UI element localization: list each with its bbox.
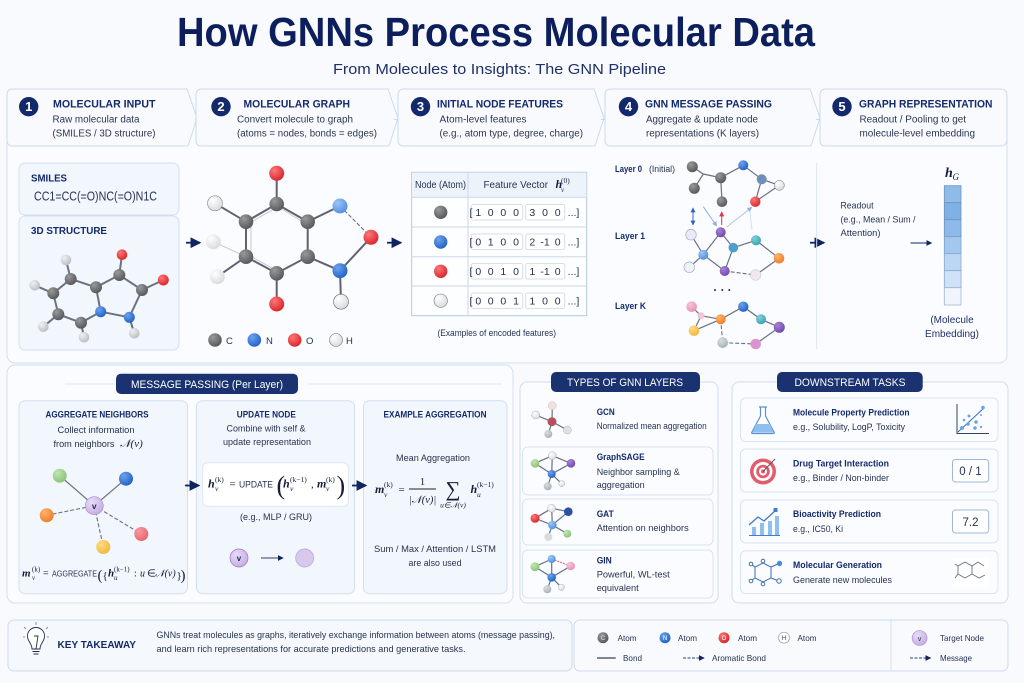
atom legend: N bbox=[266, 336, 273, 347]
legend: target node bbox=[912, 630, 984, 646]
legend: carbon atom: C bbox=[601, 636, 606, 642]
feature table: [ bbox=[470, 296, 473, 308]
sub-panel: update node: ) bbox=[336, 471, 345, 500]
layer type: GraphSAGE bbox=[522, 447, 713, 495]
panel: message passing per layer bbox=[7, 365, 513, 603]
layer type: GIN bbox=[522, 550, 713, 598]
layer type: GCN: GCN bbox=[597, 407, 615, 418]
feature table: 0 bbox=[488, 207, 494, 219]
pipeline step 5: graph representation: 5 bbox=[838, 99, 846, 114]
pipeline step 4: GNN message passing: representations (K layers) bbox=[646, 129, 759, 140]
arrow: input to graph bbox=[186, 242, 200, 244]
sub-panel: aggregate neighbors: (k) bbox=[32, 566, 41, 574]
sub-panel: example aggregation: h bbox=[470, 482, 478, 496]
sub-panel: example aggregation: = bbox=[398, 484, 405, 496]
feature table: 0 bbox=[542, 207, 548, 219]
sub-panel: aggregate neighbors: } bbox=[176, 570, 182, 582]
feature table bbox=[412, 172, 587, 316]
task: bioactivity prediction bbox=[740, 500, 998, 543]
feature table: 0 bbox=[500, 236, 506, 248]
pipeline step 3: initial node features: Atom-level features bbox=[440, 115, 526, 126]
heading: message passing: MESSAGE PASSING (Per Layer) bbox=[131, 379, 283, 391]
molecule embedding vector: Embedding) bbox=[925, 329, 979, 340]
feature table: ...] bbox=[568, 266, 579, 278]
feature table: 1 bbox=[500, 266, 506, 278]
sub-panel: example aggregation: m bbox=[375, 482, 384, 496]
feature table: 0 bbox=[475, 296, 481, 308]
legend: target node: v bbox=[918, 636, 922, 643]
sub-panel: example aggregation: EXAMPLE AGGREGATION bbox=[384, 410, 486, 420]
pipeline step 1: molecular input: → bbox=[193, 113, 202, 123]
panel: SMILES: SMILES bbox=[31, 172, 67, 184]
feature table: v bbox=[561, 186, 565, 194]
sub-panel: example aggregation: Mean Aggregation bbox=[396, 453, 470, 464]
layer type: GAT bbox=[522, 499, 713, 545]
layer type: GIN: equivalent bbox=[597, 583, 639, 594]
feature table: Node (Atom) bbox=[415, 180, 466, 191]
feature table: 0 bbox=[555, 207, 561, 219]
task: drug target interaction bbox=[740, 449, 998, 492]
arrow: graph to features bbox=[387, 242, 401, 244]
sub-panel: aggregate neighbors: AGGREGATE NEIGHBORS bbox=[46, 410, 148, 420]
panel: key takeaway: GNNs treat molecules as graphs, iteratively exchange information between atoms (message passing), bbox=[156, 630, 555, 640]
arrow: update to example bbox=[352, 484, 366, 486]
feature table: 1 bbox=[529, 266, 535, 278]
feature table: 1 bbox=[529, 296, 535, 308]
pipeline step 5: graph representation: Readout / Pooling to get bbox=[860, 115, 966, 126]
feature table: 0 bbox=[500, 207, 506, 219]
sub-panel: update node: v bbox=[290, 484, 294, 493]
task: molecular generation: Generate new molecules bbox=[793, 575, 892, 586]
sub-panel: update node: Combine with self & bbox=[226, 424, 306, 435]
sub-panel: aggregate neighbors: h bbox=[108, 568, 114, 580]
sub-panel: update node bbox=[196, 401, 354, 594]
sub-panel: update node: , bbox=[311, 479, 314, 491]
legend: target node: Target Node bbox=[940, 633, 984, 643]
panel: key takeaway: KEY TAKEAWAY bbox=[58, 639, 136, 651]
feature table: [ bbox=[470, 236, 473, 248]
sub-panel: example aggregation: ∑ bbox=[446, 477, 460, 501]
panel: 3D structure: 3D STRUCTURE bbox=[31, 225, 107, 237]
panel: key takeaway: and learn rich representations for accurate predictions and generative tasks. bbox=[156, 644, 466, 654]
value box: regression output: 7.2 bbox=[962, 517, 978, 529]
sub-panel: aggregate neighbors: = bbox=[43, 569, 49, 580]
sub-panel: aggregate neighbors: ( bbox=[98, 568, 102, 584]
legend: hydrogen atom bbox=[778, 632, 816, 643]
pipeline step 4: GNN message passing: Aggregate & update node bbox=[646, 115, 758, 126]
panel: legend bbox=[574, 620, 1008, 671]
panel: pipeline container bbox=[7, 118, 1007, 363]
task: bioactivity prediction: e.g., IC50, Ki bbox=[793, 524, 843, 535]
heading: downstream tasks: DOWNSTREAM TASKS bbox=[794, 377, 906, 389]
feature table: 0 bbox=[555, 266, 561, 278]
sub-panel: aggregate neighbors: AGGREGATE bbox=[52, 570, 97, 579]
message passing layers diagram: Layer K bbox=[615, 301, 646, 311]
panel: 3D structure bbox=[19, 216, 179, 350]
legend: nitrogen atom: Atom bbox=[678, 633, 697, 643]
value box: regression output bbox=[952, 510, 989, 533]
sub-panel: example aggregation: |𝒩(v)| bbox=[409, 495, 436, 506]
feature table: 0 bbox=[555, 236, 561, 248]
pipeline step 4: GNN message passing: 4 bbox=[625, 99, 633, 114]
sub-panel: example aggregation: u∈𝒩(v) bbox=[440, 501, 466, 510]
pipeline step 4: GNN message passing: → bbox=[814, 113, 823, 123]
layer type: GCN bbox=[532, 402, 707, 438]
layer type: GIN: GIN bbox=[597, 556, 612, 566]
heading: types of GNN layers: TYPES OF GNN LAYERS bbox=[567, 377, 683, 389]
panel: types of GNN layers bbox=[520, 372, 718, 603]
legend: oxygen atom bbox=[718, 632, 757, 643]
molecule embedding vector bbox=[925, 166, 979, 340]
title: How GNNs Process Molecular Data bbox=[177, 9, 816, 55]
sub-panel: update node: update representation bbox=[223, 437, 311, 448]
legend: message bbox=[910, 653, 972, 663]
pipeline step 3: initial node features: INITIAL NODE FEATURES bbox=[437, 98, 563, 110]
layer type: GIN: Powerful, WL-test bbox=[597, 570, 670, 580]
layer type: GraphSAGE: GraphSAGE bbox=[597, 452, 645, 463]
sub-panel: aggregate neighbors: 𝒩(v) bbox=[120, 438, 143, 450]
feature table: 0 bbox=[513, 266, 519, 278]
sub-panel: example aggregation: (k) bbox=[384, 480, 393, 489]
feature table: 0 bbox=[475, 236, 481, 248]
task: molecular generation bbox=[740, 551, 998, 594]
sub-panel: update node: v bbox=[215, 484, 219, 493]
sub-panel: update node: h bbox=[283, 477, 290, 491]
sub-panel: example aggregation: u bbox=[477, 490, 481, 499]
legend: hydrogen atom: H bbox=[782, 636, 786, 642]
legend: hydrogen atom: Atom bbox=[798, 633, 816, 643]
task: molecule property prediction: Molecule Property Prediction bbox=[793, 408, 910, 419]
sub-panel: aggregate neighbors: ∈ bbox=[147, 569, 156, 580]
atom legend: O bbox=[306, 336, 313, 347]
pipeline step 3: initial node features: (e.g., atom type, degree, charge) bbox=[440, 129, 583, 140]
layer type: GraphSAGE: aggregation bbox=[597, 480, 645, 491]
pipeline step 2: molecular graph: Convert molecule to graph bbox=[237, 115, 353, 126]
feature table: 1 bbox=[475, 207, 481, 219]
legend: message: Message bbox=[940, 653, 972, 663]
pipeline step 1: molecular input: (SMILES / 3D structure) bbox=[52, 129, 156, 140]
task: molecular generation: Molecular Generation bbox=[793, 560, 882, 571]
pipeline step 1: molecular input bbox=[7, 89, 202, 146]
feature table: 0 bbox=[513, 207, 519, 219]
task: bioactivity prediction: Bioactivity Prediction bbox=[793, 509, 881, 520]
pipeline step 4: GNN message passing bbox=[605, 89, 823, 146]
feature table: -1 bbox=[540, 236, 550, 248]
sub-panel: update node: ( bbox=[276, 471, 285, 500]
legend: carbon atom: Atom bbox=[618, 633, 637, 643]
sub-panel: example aggregation bbox=[364, 401, 507, 594]
feature table: 1 bbox=[488, 236, 494, 248]
pipeline step 5: graph representation: GRAPH REPRESENTATION bbox=[859, 98, 993, 110]
feature table: -1 bbox=[540, 266, 550, 278]
task: molecule property prediction: e.g., Solubility, LogP, Toxicity bbox=[793, 422, 905, 433]
sub-panel: example aggregation: (k−1) bbox=[477, 480, 494, 489]
layer type: GAT: Attention on neighbors bbox=[597, 523, 689, 534]
sub-panel: example aggregation: v bbox=[384, 490, 388, 499]
icon: rising bar chart bbox=[749, 508, 780, 536]
icon: flask bbox=[752, 407, 774, 434]
legend: bond bbox=[597, 653, 642, 663]
sub-panel: update node: (k) bbox=[215, 475, 224, 484]
readout text: Readout bbox=[840, 201, 874, 212]
sub-panel: aggregate neighbors bbox=[19, 401, 188, 594]
icon: scatter plot bbox=[957, 404, 989, 434]
arrow: readout to embedding bbox=[910, 242, 932, 244]
feature table: ...] bbox=[568, 296, 579, 308]
sub-panel: aggregate neighbors: (k−1) bbox=[114, 566, 130, 574]
pipeline step 1: molecular input: 1 bbox=[25, 99, 32, 114]
sub-panel: update node: v bbox=[326, 484, 330, 493]
panel: SMILES bbox=[19, 163, 179, 215]
feature table: 0 bbox=[488, 296, 494, 308]
sub-panel: update node: UPDATE NODE bbox=[237, 410, 296, 420]
molecule embedding vector: h bbox=[945, 166, 953, 181]
sub-panel: update node: v bbox=[237, 554, 242, 563]
molecule embedding vector: G bbox=[952, 172, 960, 182]
sub-panel: aggregate neighbors: from neighbors bbox=[54, 439, 115, 450]
pipeline step 3: initial node features bbox=[398, 89, 608, 146]
pipeline step 1: molecular input: Raw molecular data bbox=[52, 115, 140, 126]
legend: carbon atom bbox=[598, 632, 637, 643]
legend: nitrogen atom: N bbox=[663, 636, 667, 642]
arrow: aggregate to update bbox=[185, 484, 199, 486]
feature table: [ bbox=[470, 266, 473, 278]
sub-panel: aggregate neighbors: v bbox=[92, 501, 97, 511]
sub-panel: update node: (k) bbox=[326, 475, 335, 484]
pipeline step 2: molecular graph: → bbox=[392, 113, 401, 123]
atom legend: H bbox=[346, 336, 353, 347]
heading: types of GNN layers bbox=[551, 372, 700, 392]
pipeline step 2: molecular graph: MOLECULAR GRAPH bbox=[244, 98, 350, 110]
sub-panel: example aggregation: are also used bbox=[408, 558, 462, 569]
sub-panel: update node: = bbox=[230, 479, 236, 491]
sub-panel: aggregate neighbors: { bbox=[102, 570, 108, 582]
pipeline step 2: molecular graph: 2 bbox=[217, 99, 225, 114]
sub-panel: aggregate neighbors: m bbox=[22, 568, 31, 580]
arrow: layers to readout bbox=[810, 242, 824, 244]
pipeline step 4: GNN message passing: GNN MESSAGE PASSING bbox=[645, 98, 772, 110]
feature table: h bbox=[556, 177, 562, 191]
readout text: (e.g., Mean / Sum / bbox=[840, 214, 916, 226]
readout text bbox=[840, 201, 916, 239]
feature table: 1 bbox=[513, 296, 519, 308]
icon: generated molecule bbox=[749, 559, 782, 586]
table caption: (Examples of encoded features) bbox=[438, 328, 556, 338]
sub-panel: update node: (e.g., MLP / GRU) bbox=[240, 512, 312, 523]
feature table: 0 bbox=[500, 296, 506, 308]
legend: aromatic bond: Aromatic Bond bbox=[712, 653, 766, 663]
panel: SMILES: CC1=CC(=O)NC(=O)N1C bbox=[34, 188, 157, 204]
task: molecule property prediction bbox=[740, 398, 998, 442]
task: drug target interaction: e.g., Binder / Non-binder bbox=[793, 473, 889, 484]
icon: target bbox=[750, 458, 776, 484]
feature table: 0 bbox=[542, 296, 548, 308]
value box: binary output bbox=[952, 460, 989, 482]
sub-panel: aggregate neighbors: : bbox=[134, 569, 137, 580]
pipeline step 3: initial node features: 3 bbox=[417, 99, 424, 114]
feature table: 0 bbox=[475, 266, 481, 278]
value box: binary output: 0 / 1 bbox=[959, 466, 982, 478]
message passing layers diagram bbox=[615, 160, 785, 349]
feature table: 2 bbox=[529, 236, 535, 248]
sub-panel: update node: h bbox=[208, 477, 215, 491]
pipeline step 3: initial node features: → bbox=[599, 113, 608, 123]
molecular graph diagram bbox=[206, 166, 378, 312]
legend: oxygen atom: Atom bbox=[738, 633, 757, 643]
sub-panel: aggregate neighbors: u bbox=[114, 574, 118, 582]
layer type: GCN: Normalized mean aggregation bbox=[597, 421, 707, 431]
sub-panel: aggregate neighbors: ) bbox=[180, 568, 186, 584]
feature table: ...] bbox=[568, 236, 579, 248]
panel: key takeaway bbox=[8, 620, 572, 671]
layer type: GraphSAGE: Neighbor sampling & bbox=[597, 467, 680, 478]
subtitle: From Molecules to Insights: The GNN Pipeline bbox=[333, 61, 666, 78]
sub-panel: update node: UPDATE bbox=[239, 480, 273, 491]
legend: oxygen atom: O bbox=[722, 636, 727, 642]
feature table: 0 bbox=[488, 266, 494, 278]
sub-panel: aggregate neighbors: Collect information bbox=[58, 425, 134, 436]
feature table: Feature Vector bbox=[484, 180, 549, 191]
legend: aromatic bond bbox=[683, 653, 766, 663]
feature table: [ bbox=[470, 207, 473, 219]
readout text: Attention) bbox=[840, 228, 880, 239]
feature table: 0 bbox=[513, 236, 519, 248]
atom legend bbox=[208, 333, 353, 347]
sub-panel: example aggregation: Sum / Max / Attention / LSTM bbox=[374, 544, 496, 555]
heading: message passing bbox=[116, 374, 298, 394]
legend: bond: Bond bbox=[623, 653, 642, 663]
panel: downstream tasks bbox=[732, 372, 1008, 603]
sub-panel: aggregate neighbors: 𝒩(v) bbox=[155, 569, 176, 580]
atom legend: C bbox=[226, 336, 233, 347]
feature table: (0) bbox=[561, 176, 570, 185]
sub-panel: aggregate neighbors: u bbox=[140, 569, 145, 580]
icon: light bulb bbox=[23, 622, 49, 654]
sub-panel: update node: (k−1) bbox=[290, 475, 307, 484]
message passing layers diagram: Layer 1 bbox=[615, 231, 645, 241]
sub-panel: update node: m bbox=[317, 477, 326, 491]
sub-panel: example aggregation: 1 bbox=[420, 477, 425, 488]
task: drug target interaction: Drug Target Interaction bbox=[793, 459, 889, 470]
pipeline step 5: graph representation: molecule-level embedding bbox=[860, 129, 975, 140]
pipeline step 5: graph representation bbox=[820, 89, 1007, 146]
pipeline step 2: molecular graph bbox=[196, 89, 401, 146]
pipeline step 1: molecular input: MOLECULAR INPUT bbox=[53, 98, 156, 110]
pipeline step 2: molecular graph: (atoms = nodes, bonds = edges) bbox=[237, 129, 377, 140]
feature table: 0 bbox=[555, 296, 561, 308]
feature table: ...] bbox=[568, 207, 579, 219]
sub-panel: aggregate neighbors: v bbox=[32, 574, 36, 582]
heading: downstream tasks bbox=[777, 372, 923, 392]
feature table: 3 bbox=[529, 207, 535, 219]
message passing layers diagram: (Initial) bbox=[649, 164, 675, 174]
icon: molecule sketch bbox=[952, 558, 988, 587]
molecule embedding vector: (Molecule bbox=[930, 315, 974, 326]
legend: nitrogen atom bbox=[660, 632, 697, 643]
message passing layers diagram: Layer 0 bbox=[615, 164, 642, 174]
layer type: GAT: GAT bbox=[597, 509, 614, 520]
